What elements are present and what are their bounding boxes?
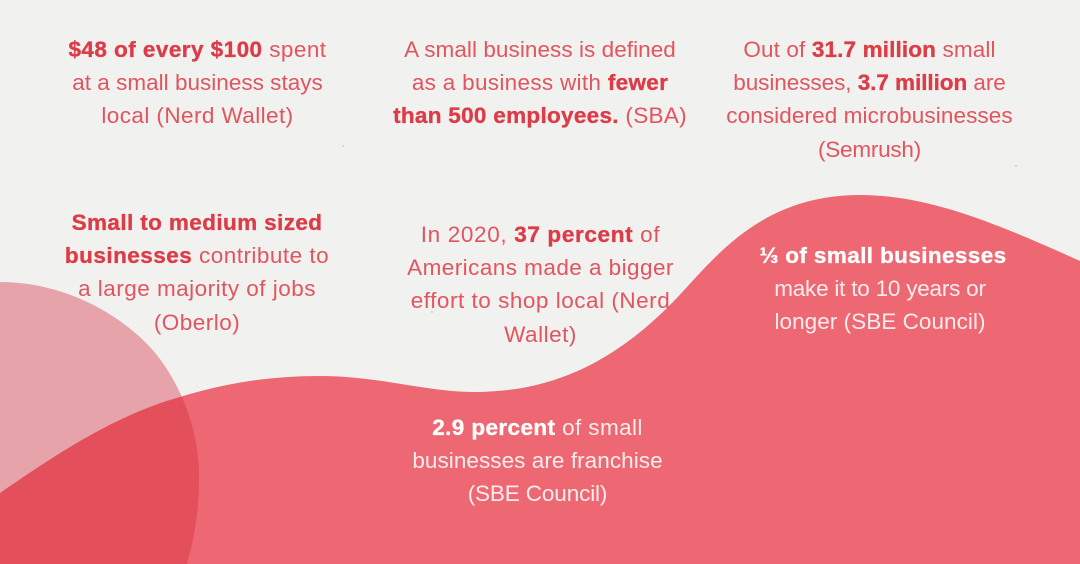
wave: [0, 195, 1080, 564]
text: definition: as a business with fewer: [412, 70, 668, 95]
text: jobs: (Oberlo): [154, 310, 240, 335]
text: shop local: In 2020, 37 percent of: [421, 222, 660, 247]
text: microbusinesses: businesses, 3.7 million are: [733, 70, 1006, 95]
text: $48: at a small business stays: [72, 70, 323, 95]
text: ten years: longer (SBE Council): [774, 309, 986, 334]
circle: [0, 282, 199, 564]
text: franchise: [412, 415, 663, 506]
text: franchise: businesses are franchise: [412, 448, 663, 473]
text: microbusinesses: considered microbusinesses: [726, 103, 1013, 128]
text: jobs: businesses contribute to: [65, 243, 329, 268]
text: jobs: Small to medium sized: [72, 210, 322, 235]
text: shop local: Americans made a bigger: [407, 255, 674, 280]
text: jobs: a large majority of jobs: [78, 276, 316, 301]
text: definition: than 500 employees. (SBA): [393, 103, 687, 128]
text: franchise: (SBE Council): [468, 481, 607, 506]
text: microbusinesses: [726, 37, 1013, 162]
text: $48: $48 of every $100 spent: [68, 37, 327, 62]
text: microbusinesses: (Semrush): [818, 137, 921, 162]
text: franchise: 2.9 percent of small: [432, 415, 643, 440]
text: definition: A small business is defined: [404, 37, 676, 62]
text: jobs: [65, 210, 329, 335]
text: definition: [393, 37, 687, 128]
text: ten years: ⅓ of small businesses: [759, 243, 1007, 268]
text: $48: local (Nerd Wallet): [101, 103, 294, 128]
text: ten years: make it to 10 years or: [774, 276, 986, 301]
text: shop local: Wallet): [504, 322, 577, 347]
text: shop local: [407, 222, 674, 347]
text: $48: [68, 37, 327, 128]
text: shop local: effort to shop local (Nerd: [411, 288, 670, 313]
text: ten years: [759, 243, 1007, 334]
text: microbusinesses: Out of 31.7 million small: [743, 37, 996, 62]
